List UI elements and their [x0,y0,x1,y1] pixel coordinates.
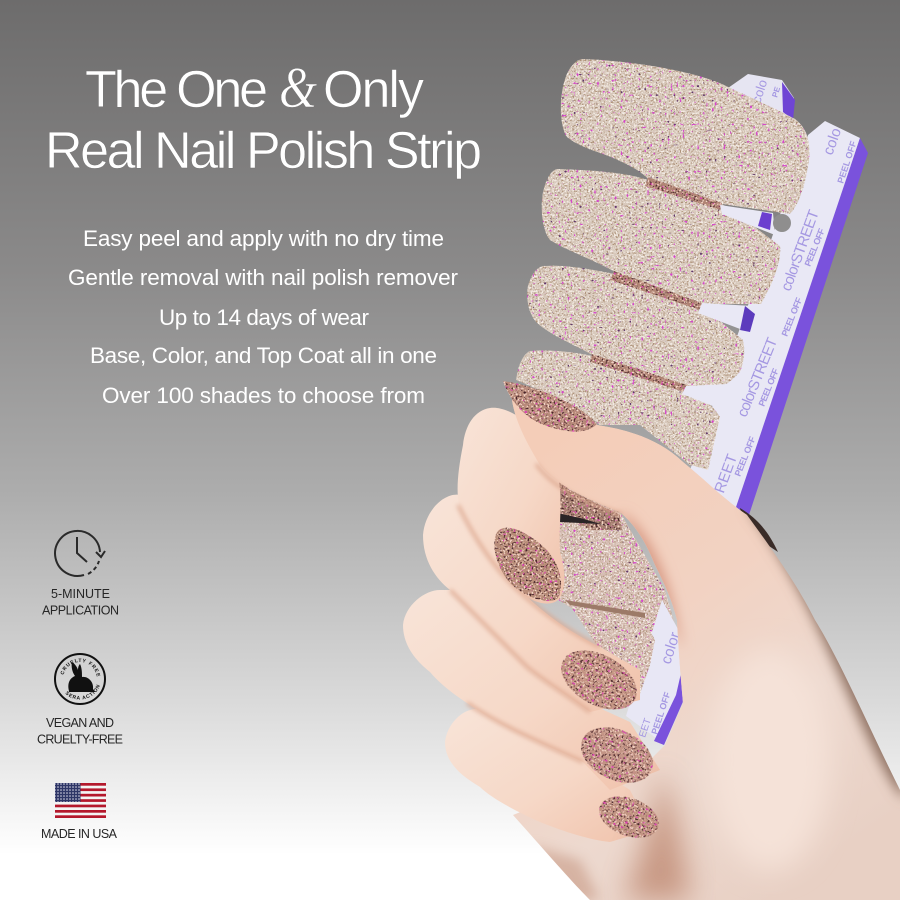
backing printed labels: PEEL OFF [733,435,758,478]
nail: index [494,528,561,601]
hand [403,381,900,900]
palm shading [530,505,900,900]
glitter remnant near backing [565,598,655,700]
backing printed labels: PEEL OFF [780,296,804,338]
lower backing: color [658,630,684,666]
title [45,55,482,180]
backing printed labels: colorSTREET [778,208,823,293]
nail: pinky [593,789,665,845]
icon: cruelty free rabbit: CRUELTY FREE [60,658,100,677]
label: 5-minute application [42,587,119,618]
benefits list: Easy peel and apply with no dry time [83,226,444,251]
badge: vegan and cruelty-free [37,653,123,746]
dark gap [548,511,622,530]
icon: US flag [55,783,106,818]
rose line in lower strip [565,600,645,618]
backing printed labels: PEEL OFF [757,366,781,408]
finger creases [450,464,622,762]
benefits list: Base, Color, and Top Coat all in one [90,343,437,368]
middle finger [423,495,640,712]
label: 5-minute application: 5-MINUTE [51,587,110,601]
label: vegan and cruelty-free: VEGAN AND [46,716,114,730]
rose strip behind thumb [540,468,622,530]
icon: clock [55,531,105,576]
wrist shadow [740,508,778,552]
backing printed labels: PEEL OFF [803,226,827,268]
benefits list: Up to 14 days of wear [159,305,370,330]
benefits list: Over 100 shades to choose from [102,383,425,408]
label: 5-minute application: APPLICATION [42,604,119,618]
badge: 5-minute application [42,531,119,618]
lower backing: PEEL OFF [649,690,673,736]
backing printed labels: STREET [705,452,741,513]
backing printed labels [705,126,859,513]
nail: thumb [503,381,597,432]
pinky finger [445,709,650,842]
main backing sheet [690,121,860,522]
index finger [458,408,564,604]
label: vegan and cruelty-free [37,716,123,746]
title: The One [85,61,268,119]
label: made in USA: MADE IN USA [41,827,118,841]
glitter nail strips [516,59,809,470]
lower backing: EET [637,717,654,739]
icon: cruelty free rabbit: SERA ACTIONS [66,684,100,700]
benefits list: Gentle removal with nail polish remover [68,265,458,290]
thumb [512,398,780,703]
title: & [279,55,317,120]
benefits list [68,226,458,408]
rose glitter strips between nails [590,177,722,392]
purple edge of backing [733,138,868,527]
notches between nails [682,205,791,412]
nail: middle [551,638,647,722]
upper backing tab: colo [749,78,770,105]
backing printed labels: colorSTREET [734,335,781,419]
lower glitter strip behind thumb [540,470,675,655]
icon: cruelty free rabbit [54,653,106,705]
nail strip product [516,59,868,745]
upper backing tab: PE [770,85,782,99]
nail: ring [572,716,662,794]
ring finger [403,590,660,790]
title: Real Nail Polish Strip [45,122,482,180]
title: Only [323,61,424,119]
upper backing tab [720,74,795,122]
badge: made in USA [41,783,118,841]
backing printed labels: colo [820,126,845,157]
backing printed labels: PEEL OFF [835,139,859,185]
palm [512,398,900,900]
label: vegan and cruelty-free: CRUELTY-FREE [37,732,123,746]
lower backing [626,600,685,745]
